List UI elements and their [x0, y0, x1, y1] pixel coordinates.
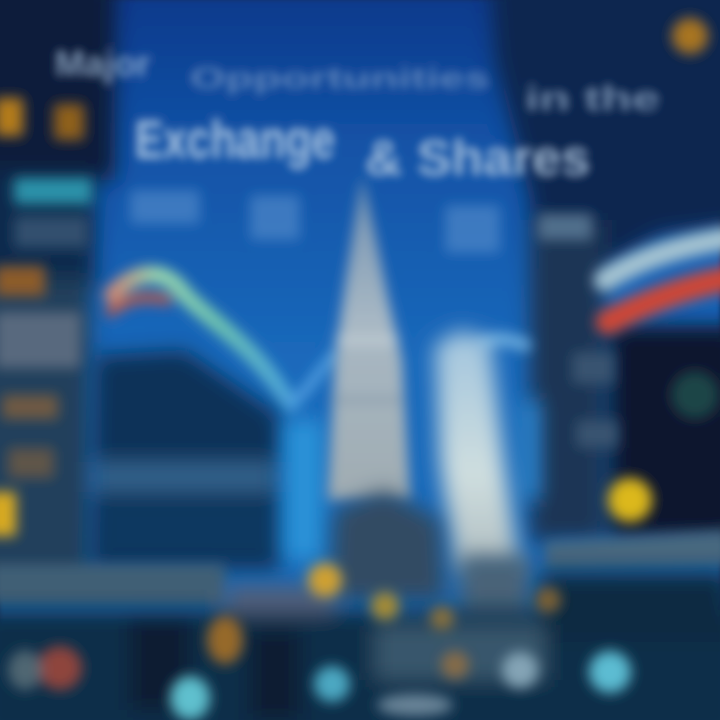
right dark building column [490, 0, 720, 560]
stat labels [130, 190, 500, 253]
title text [55, 43, 660, 186]
dark building lower left [90, 350, 280, 570]
line chart curve [110, 274, 525, 405]
yellow lights [207, 478, 652, 679]
colored street lights [8, 646, 631, 720]
red and white swoosh [605, 238, 720, 322]
title text: in the [525, 80, 660, 118]
title text: Opportunities [190, 62, 490, 95]
right band [545, 530, 720, 570]
title text: Exchange [135, 110, 335, 170]
lower left band [0, 564, 225, 606]
right building details [538, 18, 719, 448]
street level foreground [0, 572, 720, 720]
central tower [328, 175, 410, 500]
second tower [435, 330, 520, 570]
left building details [0, 98, 92, 536]
title text: & Shares [365, 130, 590, 186]
light blue glass column [285, 400, 540, 560]
title text: Major [55, 43, 150, 84]
left dark building column [0, 0, 115, 580]
tower base [330, 490, 530, 625]
